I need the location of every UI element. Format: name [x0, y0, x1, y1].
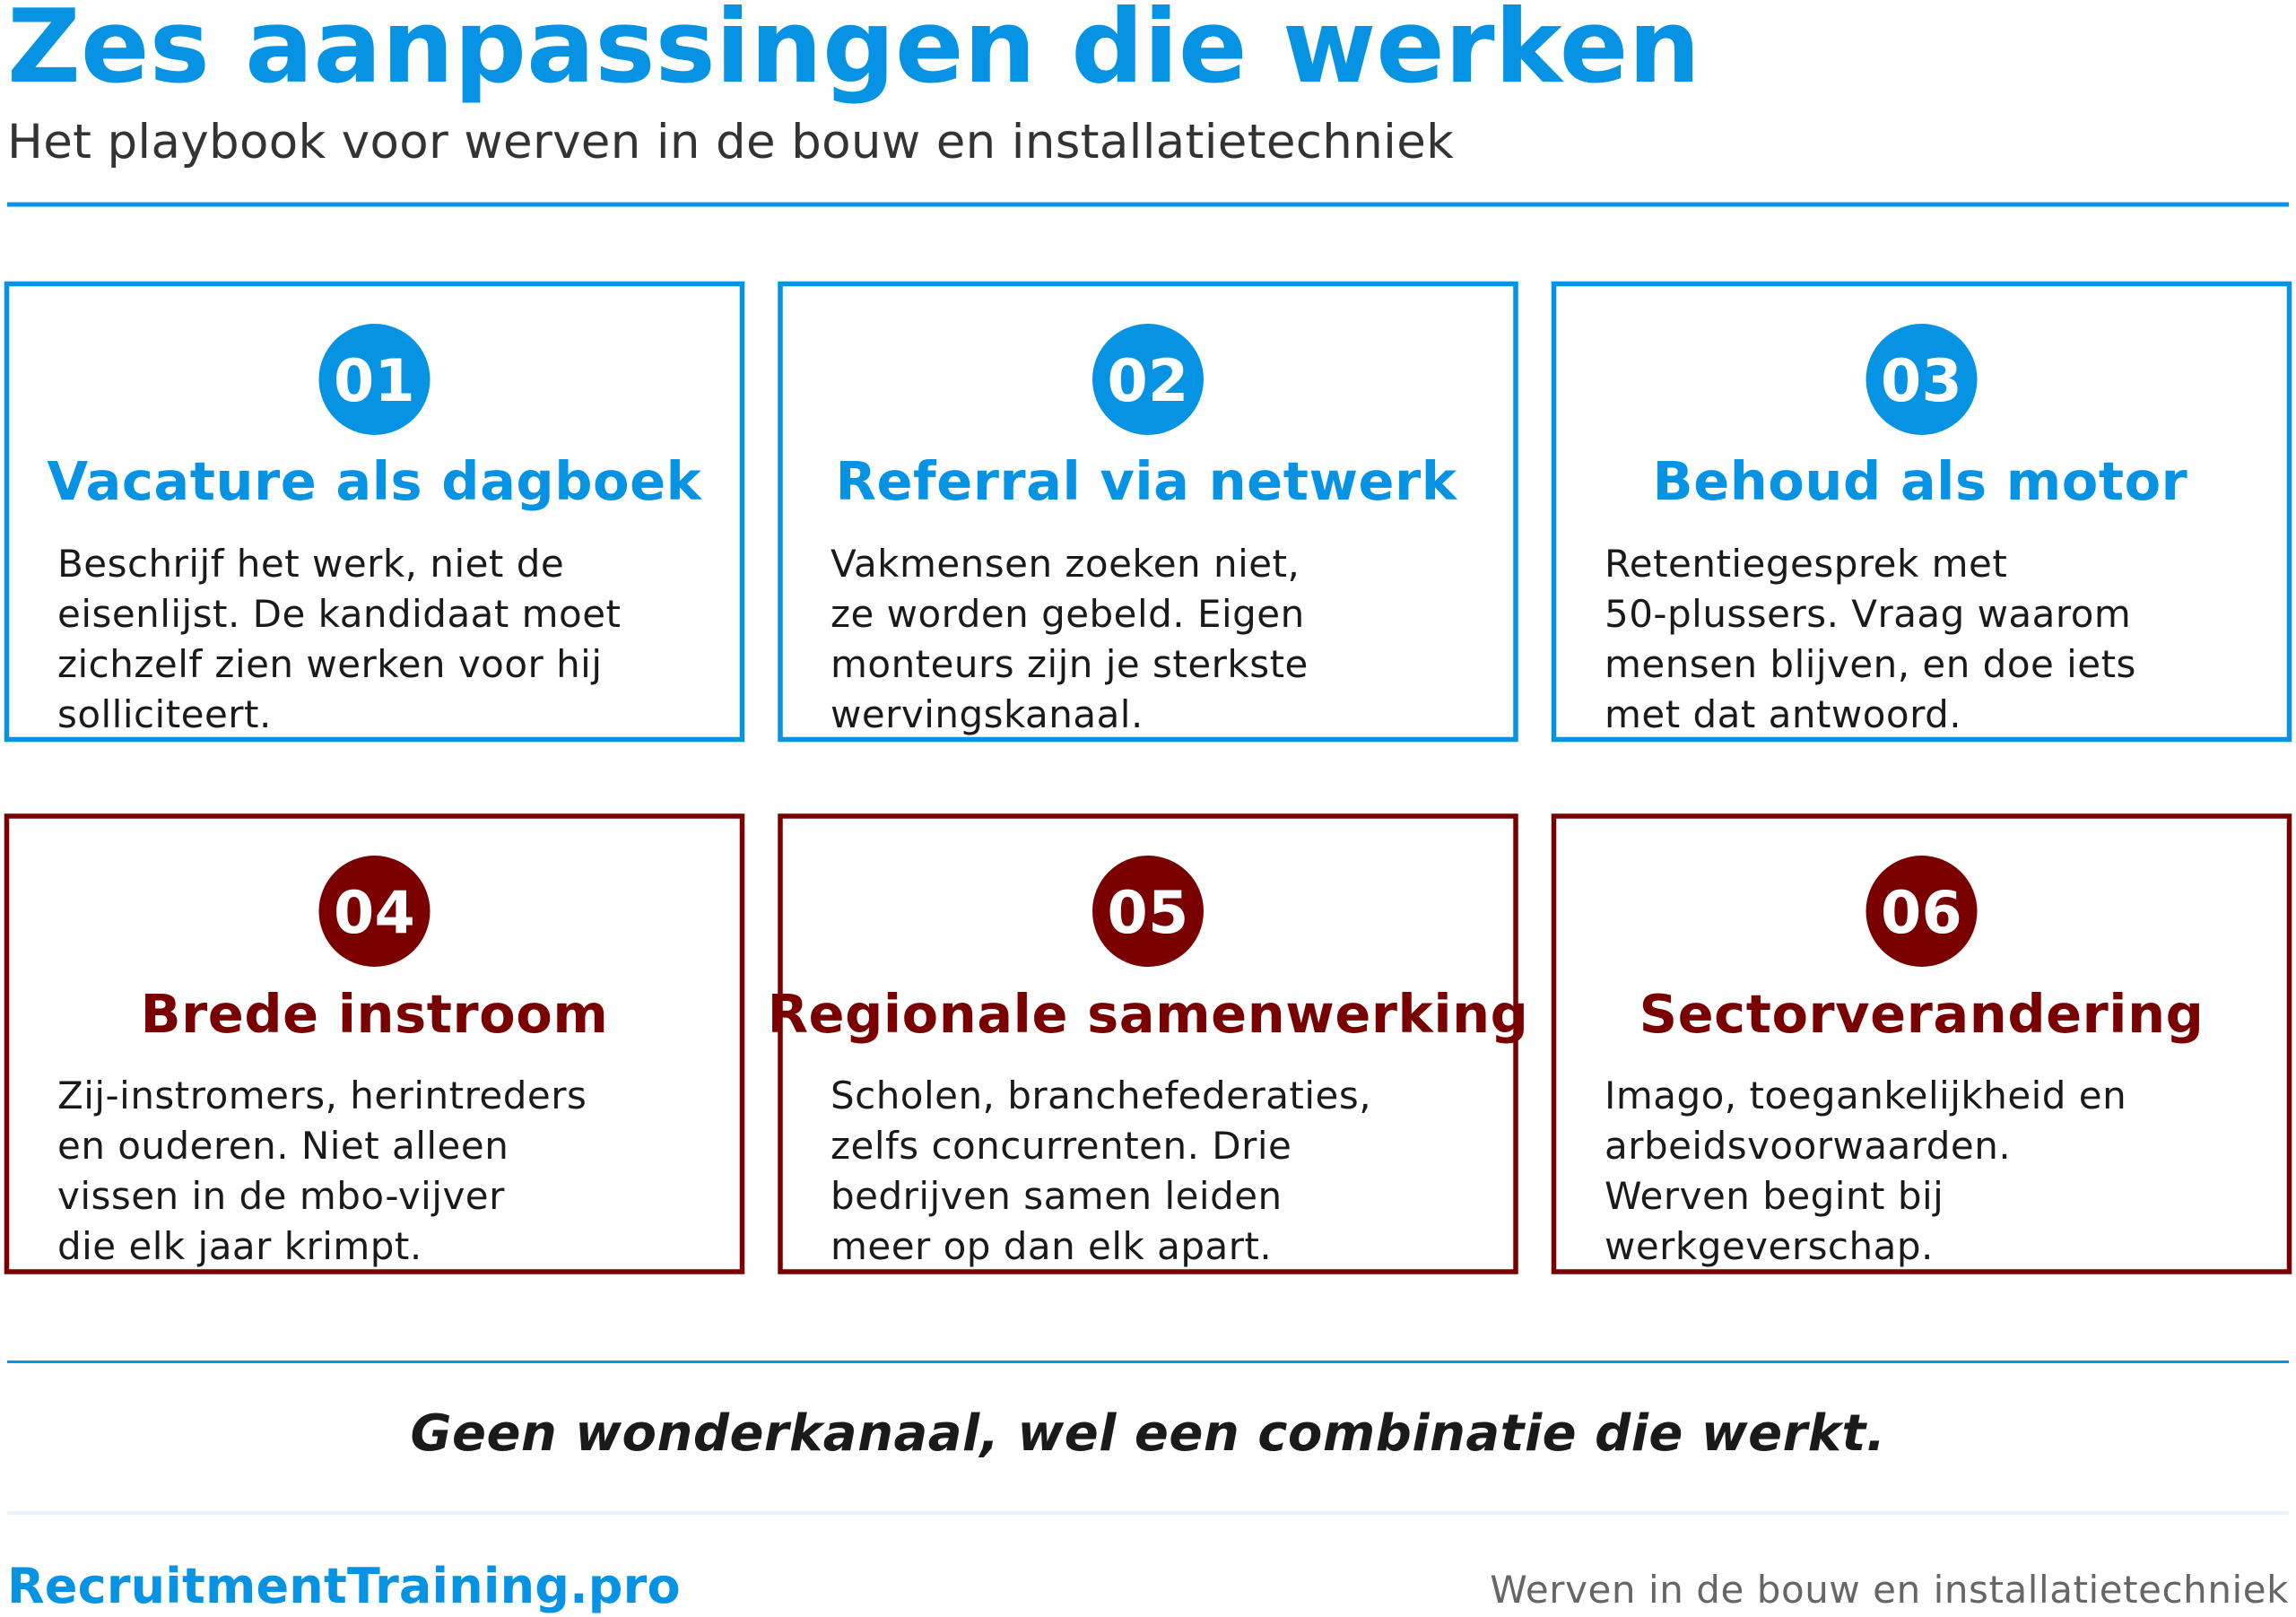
panel: 02 Referral via netwerk [780, 283, 1516, 739]
body 03: met dat antwoord. [1605, 692, 1961, 736]
badge 05 [1092, 856, 1204, 967]
badge 04 [319, 856, 430, 967]
badge 01 [319, 324, 430, 435]
heading 03: Behoud als motor [1653, 450, 2187, 512]
body 02: monteurs zijn je sterkste [831, 642, 1309, 686]
badge 02 [1092, 324, 1204, 435]
badge 06 [1866, 856, 1977, 967]
body 05: bedrijven samen leiden [831, 1174, 1283, 1218]
badge 03: 03 [1881, 348, 1962, 415]
body 02: ze worden gebeld. Eigen [831, 592, 1305, 636]
body 05: Scholen, branchefederaties, [831, 1074, 1371, 1117]
subtitle: Het playbook voor werven in de bouw en installatietechniek [7, 115, 1454, 170]
body 05: meer op dan elk apart. [831, 1224, 1272, 1268]
body 04: vissen in de mbo-vijver [57, 1174, 505, 1218]
closing statement: Geen wonderkanaal, wel een combinatie die werkt. [411, 1404, 1885, 1463]
badge 03 [1866, 324, 1977, 435]
heading 02: Referral via netwerk [835, 450, 1458, 512]
body 01: eisenlijst. De kandidaat moet [57, 592, 621, 636]
body 05: zelfs concurrenten. Drie [831, 1124, 1292, 1168]
badge 04: 04 [334, 880, 415, 947]
body 03: Retentiegesprek met [1605, 542, 2007, 586]
panel: 03 Behoud als motor [1553, 283, 2289, 739]
badge 05: 05 [1107, 880, 1189, 947]
body 04: en ouderen. Niet alleen [57, 1124, 509, 1168]
body 03: 50-plussers. Vraag waarom [1605, 592, 2131, 636]
body 04: die elk jaar krimpt. [57, 1224, 422, 1268]
body 06: arbeidsvoorwaarden. [1605, 1124, 2011, 1168]
footer tagline: Werven in de bouw en installatietechniek [1490, 1568, 2289, 1612]
heading 06: Sectorverandering [1639, 983, 2204, 1045]
body 06: werkgeverschap. [1605, 1224, 1934, 1268]
panel: 04 Brede instroom [7, 816, 743, 1272]
body 02: Vakmensen zoeken niet, [831, 542, 1300, 586]
body 03: mensen blijven, en doe iets [1605, 642, 2136, 686]
badge 01: 01 [334, 348, 415, 415]
body 01: solliciteert. [57, 692, 272, 736]
body 06: Werven begint bij [1605, 1174, 1944, 1218]
body 01: zichzelf zien werken voor hij [57, 642, 602, 686]
body 06: Imago, toegankelijkheid en [1605, 1074, 2126, 1117]
heading 01: Vacature als dagboek [48, 450, 703, 512]
panel: 05 Regionale samenwerking [768, 816, 1528, 1272]
badge 06: 06 [1881, 880, 1962, 947]
panel: 06 Sectorverandering [1553, 816, 2289, 1272]
body 04: Zij-instromers, herintreders [57, 1074, 587, 1117]
panel: 01 Vacature als dagboek [7, 283, 743, 739]
body 02: wervingskanaal. [831, 692, 1144, 736]
body 01: Beschrijf het werk, niet de [57, 542, 564, 586]
badge 02: 02 [1107, 348, 1189, 415]
heading 05: Regionale samenwerking [768, 983, 1528, 1045]
heading 04: Brede instroom [141, 983, 608, 1045]
footer brand: RecruitmentTraining.pro [7, 1558, 681, 1614]
